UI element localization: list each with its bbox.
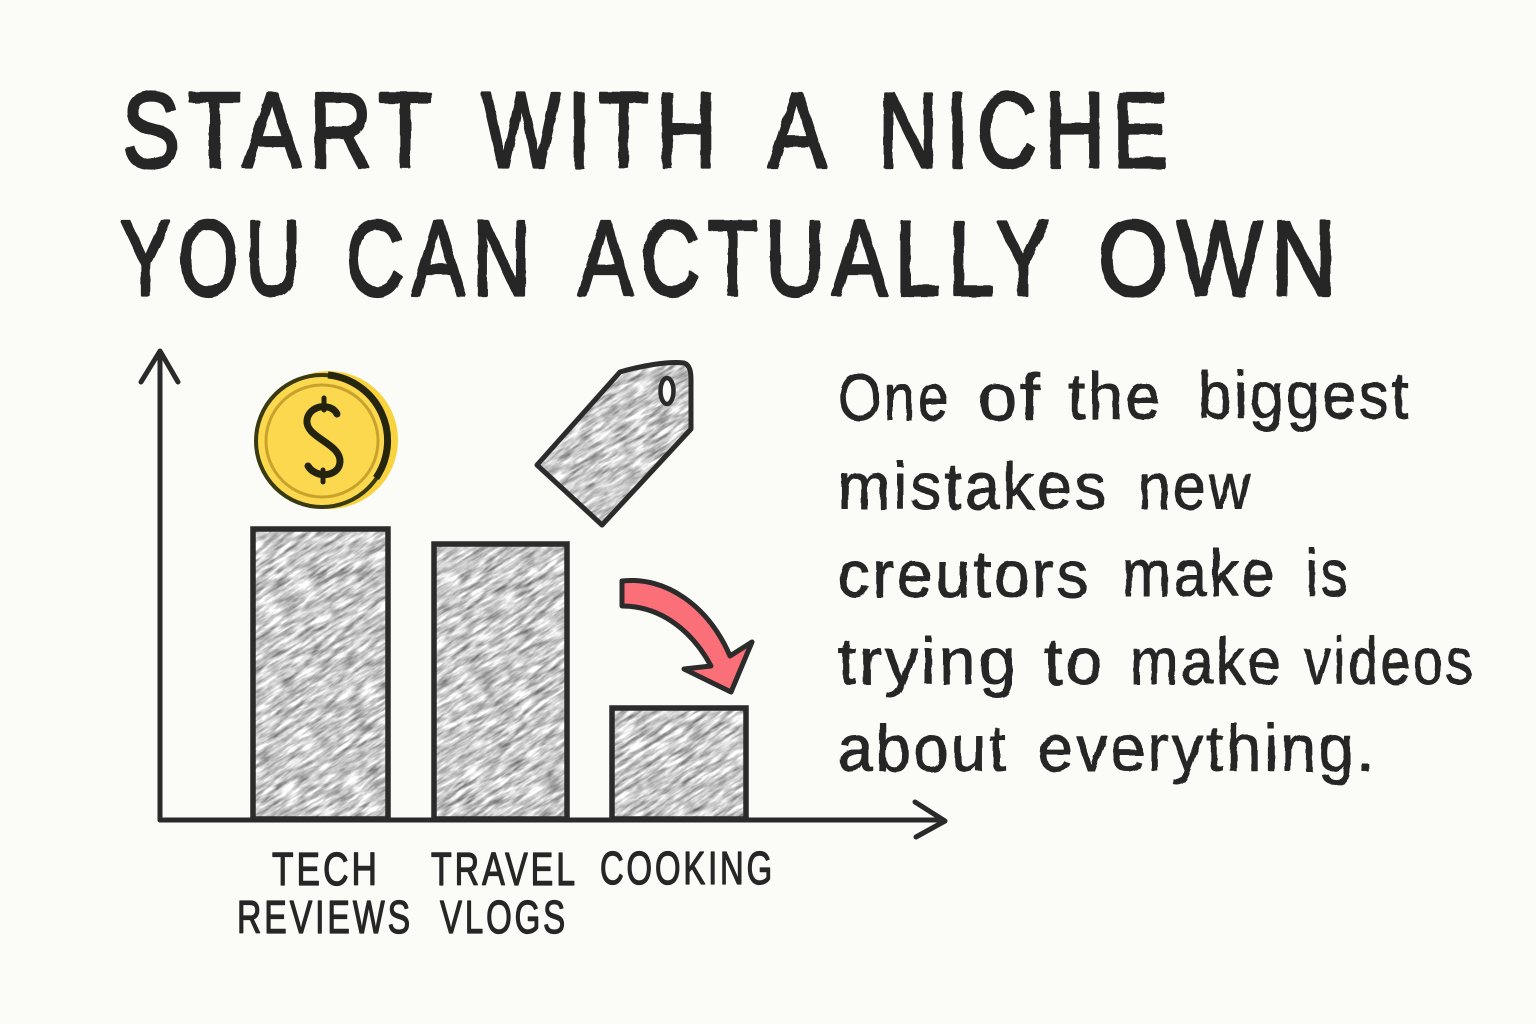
body text: mistakes (838, 449, 1109, 523)
body text: about (838, 711, 1009, 785)
label: tech reviews: REVIEWS (237, 891, 413, 943)
label: cooking: COOKING (600, 842, 775, 894)
icon: price tag (534, 360, 694, 528)
body text: One (838, 360, 951, 434)
icon: dollar coin (256, 371, 398, 509)
body text: is (1306, 536, 1350, 610)
title: CAN (346, 198, 538, 318)
title: ACTUALLY (578, 198, 1058, 318)
body text: trying (838, 624, 1019, 698)
bar: tech reviews (250, 526, 391, 818)
body text: biggest (1198, 358, 1411, 432)
body text: everything. (1038, 711, 1377, 785)
label: tech reviews (237, 843, 413, 943)
label: travel vlogs: TRAVEL (431, 843, 578, 895)
arrow: decline (622, 580, 752, 692)
body text: make (1130, 624, 1283, 698)
body text: to (1044, 624, 1105, 698)
title: YOU (120, 198, 308, 318)
bar: cooking (609, 705, 749, 818)
body text: of (978, 360, 1043, 434)
label: travel vlogs: VLOGS (440, 891, 568, 943)
body text: the (1068, 359, 1163, 433)
title: WITH (482, 70, 724, 190)
title (120, 70, 1345, 318)
title: OWN (1098, 198, 1345, 318)
title: A (768, 70, 834, 190)
label: travel vlogs (431, 843, 578, 943)
body text: videos (1304, 624, 1475, 698)
title: NICHE (878, 70, 1176, 190)
title: START (122, 70, 440, 190)
body text: creutors (838, 537, 1091, 611)
body text: new (1138, 449, 1253, 523)
body text: make (1122, 536, 1277, 610)
x axis arrow (160, 802, 945, 837)
y axis arrow (141, 351, 178, 820)
bar: travel vlogs (431, 541, 570, 818)
label: tech reviews: TECH (272, 843, 380, 895)
bar chart (138, 348, 948, 934)
body text (838, 358, 1475, 785)
